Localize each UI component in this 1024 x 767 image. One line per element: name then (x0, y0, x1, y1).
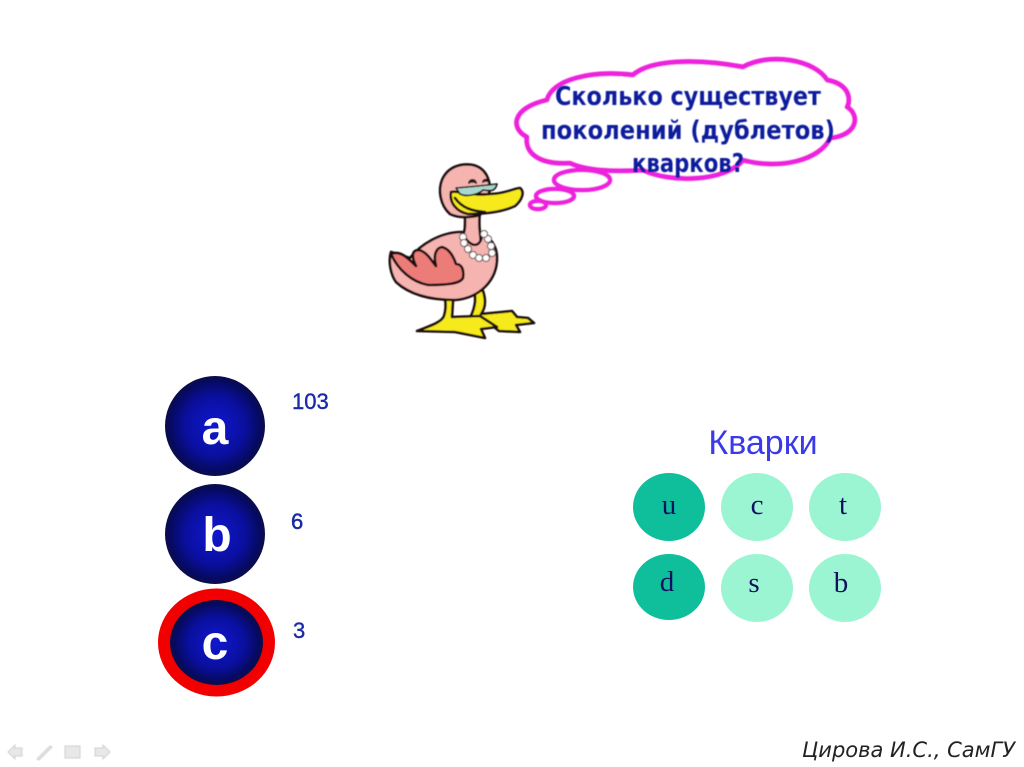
answer ball a: a (202, 402, 229, 455)
icon: menu (65, 746, 80, 758)
quark u: u (662, 489, 676, 521)
thought bubble: large (554, 170, 610, 190)
quark grid (633, 473, 881, 622)
duck necklace (460, 230, 496, 262)
answer value 6: 6 (291, 509, 303, 534)
quark b: b (834, 567, 848, 599)
duck eyes (469, 180, 489, 183)
navigation icons (8, 745, 110, 760)
quark s: s (748, 567, 760, 599)
quark d: d (660, 566, 675, 598)
answer ball b: b (202, 509, 232, 562)
icon: forward arrow (95, 745, 110, 759)
quark t: t (839, 489, 847, 521)
quark d (633, 554, 705, 620)
duck wing (391, 247, 463, 285)
duck (390, 164, 534, 338)
quark c (721, 473, 793, 541)
author credit: Цирова И.С., СамГУ (802, 738, 1016, 762)
quark t (809, 473, 881, 541)
icon: back arrow (8, 745, 22, 759)
answer ball c with red ring (158, 588, 275, 696)
cloud question text (541, 82, 835, 179)
duck near leg and foot (417, 298, 497, 338)
answer ball a (165, 376, 265, 476)
cloud question text: Сколько существует (555, 82, 821, 112)
quark s (721, 554, 793, 622)
quark c: c (751, 489, 763, 521)
thought bubble: medium (536, 189, 574, 203)
answer ball c with red ring: c (202, 617, 228, 670)
duck body (390, 232, 497, 300)
duck far leg and foot (470, 288, 534, 332)
answer value 3: 3 (293, 618, 305, 643)
cloud question text: поколений (дублетов) (541, 116, 835, 146)
icon: pen (37, 746, 52, 760)
answer ball b (165, 484, 265, 584)
duck glasses (456, 184, 497, 195)
thought cloud (517, 59, 855, 209)
quarks heading: Кварки (708, 424, 818, 462)
thought bubble: small (530, 201, 546, 209)
answer value 103: 103 (292, 389, 329, 414)
duck bill (451, 188, 522, 214)
duck head (440, 164, 490, 217)
cloud question text: кварков? (632, 149, 744, 179)
duck neck (461, 212, 482, 252)
quark u (633, 473, 705, 541)
quark b (809, 554, 881, 622)
